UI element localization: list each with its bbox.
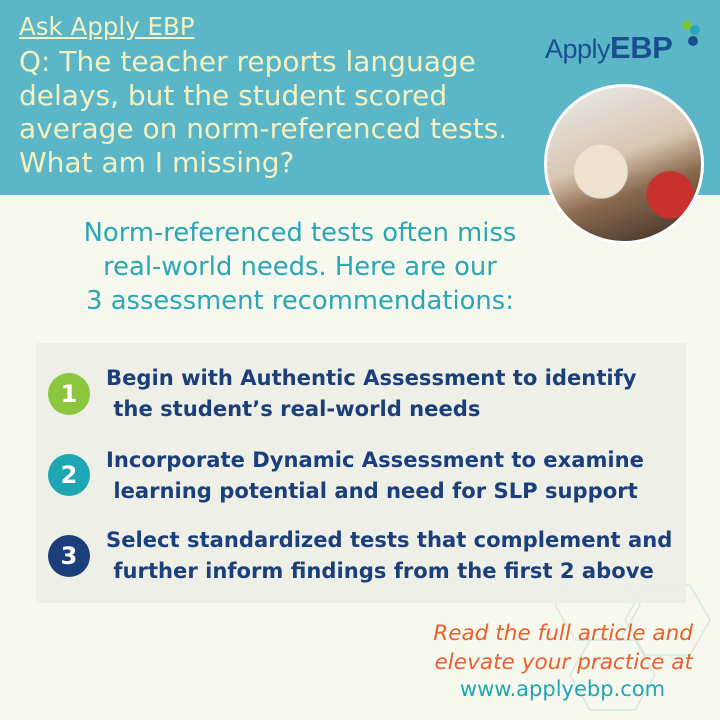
badge 3: 3 [61,542,77,570]
intro text [84,218,516,316]
intro text: Norm-referenced tests often miss [84,218,516,248]
logo [545,20,700,65]
item 2: Incorporate Dynamic Assessment to examine [106,447,644,472]
badge 2 [48,454,90,496]
call to action [433,621,694,675]
website url: www.applyebp.com [460,677,665,701]
item 3: Select standardized tests that complement and [106,527,672,552]
badge 2: 2 [61,461,77,489]
item 2 [48,447,644,503]
badge 1: 1 [61,380,77,408]
badge 1 [48,373,90,415]
question: average on norm-referenced tests. [19,112,507,145]
logo: ApplyEBP [545,30,672,65]
call to action: Read the full article and [433,621,693,646]
item 1: Begin with Authentic Assessment to identify [106,365,637,390]
item 2: learning potential and need for SLP support [113,478,638,503]
item 3: further inform findings from the first 2 above [113,558,654,583]
question: delays, but the student scored [19,78,447,112]
decorative hexagons [554,584,711,711]
recommendations panel [36,343,686,603]
question: Q: The teacher reports language [19,45,476,78]
call to action: elevate your practice at [434,650,693,675]
header band [0,0,720,195]
item 1: the student’s real-world needs [113,396,480,421]
question [19,45,507,178]
intro text: real-world needs. Here are our [103,252,497,282]
item 3 [48,527,672,583]
question: What am I missing? [19,146,294,178]
badge 3 [48,535,90,577]
photo circle [544,84,704,244]
series title: Ask Apply EBP [19,12,195,41]
intro text: 3 assessment recommendations: [86,286,514,316]
item 1 [48,365,637,421]
